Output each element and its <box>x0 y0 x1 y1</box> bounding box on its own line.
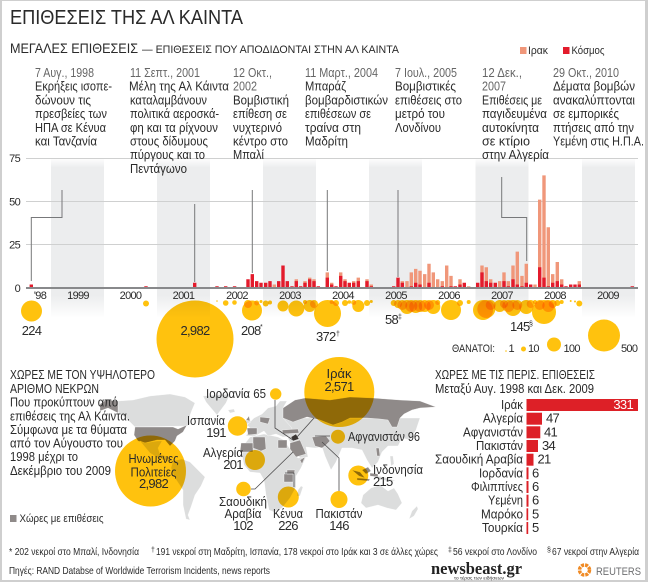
map bubbles: countries <box>228 357 374 508</box>
event: 7 Aug 1998: πρεσβείες των <box>35 107 107 121</box>
subtitle <box>10 40 400 56</box>
event: 7 Aug 1998: και Τανζανία <box>35 134 97 148</box>
event: 29 Oct 2010: Δέματα βομβών <box>553 80 635 94</box>
deaths legend: 1 <box>508 343 515 355</box>
map leader lines <box>251 400 339 491</box>
map heading and text: ΑΡΙΘΜΟ ΝΕΚΡΩΝ <box>10 381 99 396</box>
bar chart heading <box>435 367 595 396</box>
bubble value labels <box>22 312 533 344</box>
map label: USA: Πολιτείες <box>130 464 176 480</box>
bar chart: attacks by month: 0 <box>15 283 21 295</box>
bar chart: attacks by month: 75 <box>9 153 21 165</box>
event: 12 Dec 2007: 2007 <box>482 80 506 94</box>
map heading and text: επιθέσεις της Αλ Κάιντα. <box>10 408 130 424</box>
bar chart: attacks by month: 2009 <box>597 290 619 302</box>
bar chart: attacks by month: 1999 <box>67 290 89 302</box>
bubble value labels: 372 <box>316 329 336 344</box>
bubble value labels: * <box>260 324 263 331</box>
bar chart: attacks by country: Πακιστάν <box>476 438 523 453</box>
event: 11 Mar 2004: τραίνα στη <box>305 121 361 135</box>
bar chart: attacks by month: 2006 <box>438 290 460 302</box>
event: 11 Mar 2004: βομβαρδιστικών <box>305 93 388 107</box>
bar chart: attacks by month: 2000 <box>120 290 142 302</box>
bar chart: attacks by month <box>9 153 638 318</box>
bar chart: attacks by country: Αφγανιστάν <box>463 424 523 439</box>
bubble row: deaths per month <box>21 300 582 378</box>
event: 7 Jul 2005: Λονδίνου <box>395 121 441 135</box>
deaths legend: 100 <box>564 343 580 355</box>
bar chart: attacks by month: 2003 <box>279 290 301 302</box>
bubble value labels: 2,982 <box>180 323 210 338</box>
event: 11 Sep 2001: καταλαμβάνουν <box>130 93 207 107</box>
map label: Iraq <box>324 366 354 394</box>
event: 11 Mar 2004: 11 Μαρτ., 2004 <box>305 66 378 80</box>
map labels: other countries: 215 <box>373 474 393 489</box>
event: 11 Sep 2001: 11 Σεπτ., 2001 <box>130 66 200 80</box>
event: 7 Aug 1998: ΗΠΑ σε Κένυα <box>35 121 106 135</box>
bar chart: attacks by country: 34 <box>542 438 556 453</box>
map labels: other countries: Ινδονησία <box>373 462 423 477</box>
event: 7 Jul 2005: μετρό του <box>395 107 445 121</box>
bar chart heading: ΧΩΡΕΣ ΜΕ ΤΙΣ ΠΕΡΙΣ. ΕΠΙΘΕΣΕΙΣ <box>435 367 595 382</box>
event: 12 Oct 2002: 12 Οκτ., <box>233 66 272 80</box>
map labels: other countries: Αφγανιστάν 96 <box>348 429 420 444</box>
event: 11 Mar 2004 <box>305 66 388 148</box>
map labels: other countries: 201 <box>223 457 243 472</box>
footnotes: * 202 νεκροί στο Μπαλί, Ινδονησία <box>9 546 139 558</box>
footnotes: † <box>151 547 155 554</box>
map label: Iraq: Ιράκ <box>326 366 352 381</box>
bar chart: attacks by country: 47 <box>546 411 560 426</box>
bar chart: attacks by month: 2004 <box>332 290 354 302</box>
event: 11 Sep 2001: φη και τα ρίχνουν <box>130 121 218 135</box>
bubble value labels: § <box>529 321 533 328</box>
bar chart: attacks by month: 2001 <box>173 290 195 302</box>
event: 11 Sep 2001: Πεντάγωνο <box>130 162 187 176</box>
map heading and text <box>10 367 155 478</box>
deaths legend: 500 <box>621 343 638 355</box>
event: 29 Oct 2010: σε εμπορικές <box>553 107 619 121</box>
logo: newsbeast.gr: newsbeast.gr <box>431 559 522 578</box>
event: 7 Jul 2005: Βομβιστικές <box>395 80 456 94</box>
event: 11 Sep 2001 <box>129 66 229 176</box>
footnotes <box>9 546 639 558</box>
event: 7 Aug 1998: 7 Αυγ., 1998 <box>35 66 94 80</box>
title: ΕΠΙΘΕΣΕΙΣ ΤΗΣ ΑΛ ΚΑΙΝΤΑ <box>10 7 244 29</box>
event: 7 Jul 2005 <box>395 66 462 135</box>
event: 12 Oct 2002: νυχτερινό <box>233 121 282 135</box>
map key: Χώρες με επιθέσεις <box>20 513 104 525</box>
chart legend: Ιρακ <box>528 45 548 57</box>
map labels: other countries: 226 <box>278 518 298 533</box>
deaths legend: 10 <box>528 343 539 355</box>
map heading and text: 1998 μέχρι το <box>10 449 78 464</box>
event: 12 Dec 2007 <box>482 66 549 162</box>
map labels: other countries: Ιορδανία 65 <box>206 386 266 401</box>
map heading and text: ΧΩΡΕΣ ΜΕ ΤΟΝ ΥΨΗΛΟΤΕΡΟ <box>10 367 155 382</box>
event: 11 Sep 2001: στους δίδυμους <box>130 134 208 148</box>
event: 11 Sep 2001: πολιτικά αεροσκά- <box>130 107 219 121</box>
deaths legend <box>452 320 638 355</box>
bar chart: attacks by country: 5 <box>532 506 539 521</box>
map labels: other countries: Πακιστάν <box>316 506 362 521</box>
bar chart: attacks by month: 25 <box>9 240 21 252</box>
logo: Reuters <box>580 565 641 578</box>
event: 7 Jul 2005: επιθέσεις στο <box>395 93 462 107</box>
bubble value labels: 145 <box>510 319 530 334</box>
bubble value labels: 224 <box>22 323 42 338</box>
footnotes: 191 νεκροί στη Μαδρίτη, Ισπανία, 178 νεκροί στο Ιράκ και 3 σε άλλες χώρες <box>156 546 438 558</box>
bar chart: attacks by country: 6 <box>532 479 539 494</box>
subtitle: ΜΕΓΑΛΕΣ ΕΠΙΘΕΣΕΙΣ <box>10 40 138 56</box>
event: 11 Mar 2004: Μπαράζ <box>305 80 346 94</box>
map label: USA: 2,982 <box>139 476 168 491</box>
event: 11 Sep 2001: πύργους και το <box>130 148 205 162</box>
bar chart: attacks by country: Σαουδική Αραβία <box>435 452 523 467</box>
bar chart: attacks by country: Αλγερία <box>483 411 523 426</box>
map labels: other countries: 146 <box>329 518 349 533</box>
logo: Reuters: REUTERS <box>596 566 641 578</box>
map labels: other countries: Κένυα <box>273 506 303 521</box>
map labels: other countries: Σαουδική <box>219 494 267 509</box>
world map <box>100 394 436 520</box>
bar chart: attacks by country: Ιορδανία <box>479 465 523 480</box>
footnotes: § <box>547 547 551 554</box>
event: 12 Oct 2002 <box>233 66 289 162</box>
bar chart: attacks by country: 6 <box>532 465 539 480</box>
event: 12 Oct 2002: Μπαλί <box>233 148 264 162</box>
map label: USA <box>128 451 178 491</box>
bar chart: attacks by country: Μαρόκο <box>481 506 523 521</box>
map labels: other countries: Αλγερία <box>203 445 243 460</box>
map label: USA: Ηνωμένες <box>128 451 178 466</box>
event: 11 Mar 2004: επιθέσεων σε <box>305 107 371 121</box>
bar chart: attacks by country: 331 <box>613 397 633 412</box>
event: 7 Aug 1998: Εκρήξεις ισοπε- <box>35 80 112 94</box>
bar chart: attacks by country: 21 <box>538 452 551 467</box>
logo: newsbeast.gr: το τέρας των ειδήσεων <box>454 574 505 580</box>
event: 12 Oct 2002: 2002 <box>233 80 257 94</box>
leader lines from events to bars <box>31 177 527 282</box>
chart legend <box>520 45 604 57</box>
map heading and text: από τον Αύγουστο του <box>10 436 123 451</box>
event: 7 Jul 2005: 7 Ιουλ., 2005 <box>395 66 457 80</box>
footnotes: 56 νεκροί στο Λονδίνο <box>453 546 537 558</box>
bubble value labels: 208 <box>241 323 261 338</box>
bar chart: attacks by country: Φιλιππίνες <box>471 479 523 494</box>
event: 11 Sep 2001: Μέλη της Αλ Κάιντα <box>129 80 229 94</box>
event: 12 Dec 2007: στην Αλγερία <box>482 148 549 162</box>
bar chart: attacks by country: 5 <box>532 520 539 535</box>
map labels: other countries: Ισπανία <box>187 413 225 428</box>
event: 7 Aug 1998 <box>35 66 112 148</box>
bubble value labels: ‡ <box>398 314 402 321</box>
bar chart heading: Μεταξύ Αυγ. 1998 και Δεκ. 2009 <box>435 381 594 396</box>
subtitle: — ΕΠΙΘΕΣΕΙΣ ΠΟΥ ΑΠΟΔΙΔΟΝΤΑΙ ΣΤΗΝ ΑΛ ΚΑΙΝΤΑ <box>142 44 400 56</box>
event: 29 Oct 2010: πτήσεις από την <box>553 121 634 135</box>
bar chart: attacks by country: 6 <box>532 493 539 508</box>
bubble value labels: † <box>336 331 340 338</box>
event: 12 Dec 2007: Επιθέσεις με <box>482 93 542 107</box>
map bubbles: USA <box>115 436 186 506</box>
bar chart: attacks by country <box>435 397 638 535</box>
sources: Πηγές: RAND Databse of Worldwide Terrorism Incidents, news reports <box>9 565 270 577</box>
bubble value labels: 58 <box>385 312 399 327</box>
map labels: other countries: 102 <box>233 518 253 533</box>
event: 12 Oct 2002: Βομβιστική <box>233 93 289 107</box>
bar chart: attacks by month: 50 <box>9 196 21 208</box>
bar chart: attacks by month: 2008 <box>544 290 566 302</box>
footnotes: ‡ <box>448 547 452 554</box>
map labels: other countries <box>187 386 423 533</box>
event: 12 Oct 2002: επίθεση σε <box>233 107 287 121</box>
bar chart: attacks by month: 2002 <box>226 290 248 302</box>
event: 12 Dec 2007: αυτοκίνητα <box>482 121 539 135</box>
map labels: other countries: Αραβία <box>224 506 262 521</box>
event: 12 Dec 2007: παγιδευμένα <box>482 107 547 121</box>
map labels: other countries: 191 <box>206 425 226 440</box>
map heading and text: Σύμφωνα με τα θύματα <box>10 422 127 437</box>
event: 12 Dec 2007: σε κτίριο <box>482 134 530 148</box>
map label: Iraq: 2,571 <box>324 379 354 394</box>
event: 29 Oct 2010: ανακαλύπτονται <box>553 93 635 107</box>
deaths legend: ΘΑΝΑΤΟΙ: <box>452 343 495 355</box>
bar chart: attacks by country: 41 <box>544 424 558 439</box>
event: 12 Dec 2007: 12 Δεκ., <box>482 66 522 80</box>
chart legend: Κόσμος <box>572 45 604 57</box>
event: 12 Oct 2002: κέντρο στο <box>233 134 288 148</box>
bar chart: attacks by month: '98 <box>34 290 47 302</box>
bar chart: attacks by country: Τουρκία <box>482 520 523 535</box>
map heading and text: Που προκύπτουν από <box>10 395 118 410</box>
bar chart: attacks by country: Ιράκ <box>501 397 523 412</box>
event: 11 Mar 2004: Μαδρίτη <box>305 134 348 148</box>
bar chart: attacks by country: Υεμένη <box>488 493 523 508</box>
event: 7 Aug 1998: δώνουν τις <box>35 93 91 107</box>
bar chart: attacks by month: 2007 <box>491 290 513 302</box>
event: 29 Oct 2010 <box>553 66 644 148</box>
bar chart: attacks by month: 2005 <box>385 290 407 302</box>
event: 29 Oct 2010: 29 Οκτ., 2010 <box>553 66 619 80</box>
map heading and text: Δεκέμβριο του 2009 <box>10 463 111 478</box>
